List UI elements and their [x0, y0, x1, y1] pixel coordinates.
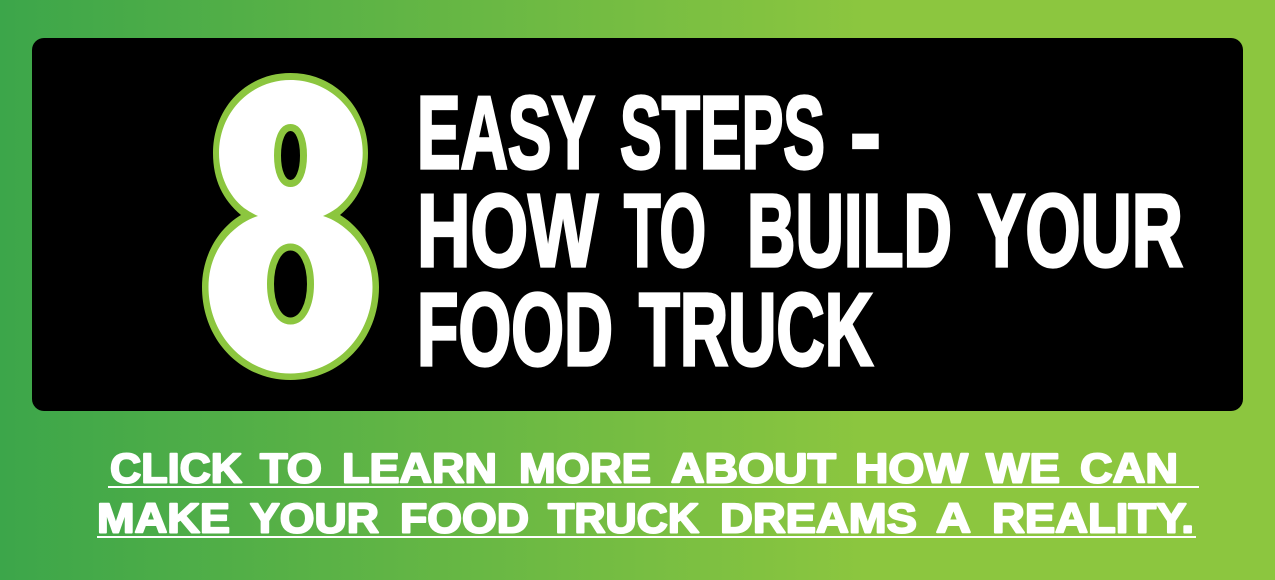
call to action text with underlines — [97, 444, 1199, 542]
heading: title text — [417, 75, 1183, 387]
call to action text with underlines: DREAMS — [720, 494, 917, 542]
icon: large numeral 8 — [202, 73, 379, 380]
call to action text with underlines: REALITY. — [992, 494, 1194, 542]
call to action text with underlines: ABOUT — [671, 444, 836, 492]
call to action text with underlines: MAKE — [97, 494, 230, 542]
call to action text with underlines: FOOD — [400, 494, 529, 542]
call to action text with underlines: HOW — [855, 444, 968, 492]
call to action text with underlines: WE — [986, 444, 1060, 492]
call to action text with underlines: LEARN — [342, 444, 497, 492]
call to action text with underlines: A — [936, 494, 971, 542]
call to action text with underlines: TO — [260, 444, 322, 492]
heading: title text: - — [850, 75, 881, 190]
call to action text with underlines: MORE — [519, 444, 651, 492]
call to action text with underlines: YOUR — [250, 494, 379, 542]
heading: title text: TO — [624, 173, 706, 288]
call to action text with underlines: CAN — [1080, 444, 1178, 492]
heading: title text: EASY — [417, 75, 595, 190]
heading: title text: YOUR — [978, 173, 1183, 288]
heading: title text: TRUCK — [639, 272, 873, 387]
panel: black title banner — [32, 38, 1243, 411]
heading: title text: FOOD — [417, 272, 613, 387]
heading: title text: HOW — [417, 173, 599, 288]
call to action text with underlines: TRUCK — [548, 494, 699, 542]
heading: title text: BUILD — [747, 173, 952, 288]
call to action text with underlines: CLICK — [110, 444, 242, 492]
heading: title text: STEPS — [620, 75, 825, 190]
